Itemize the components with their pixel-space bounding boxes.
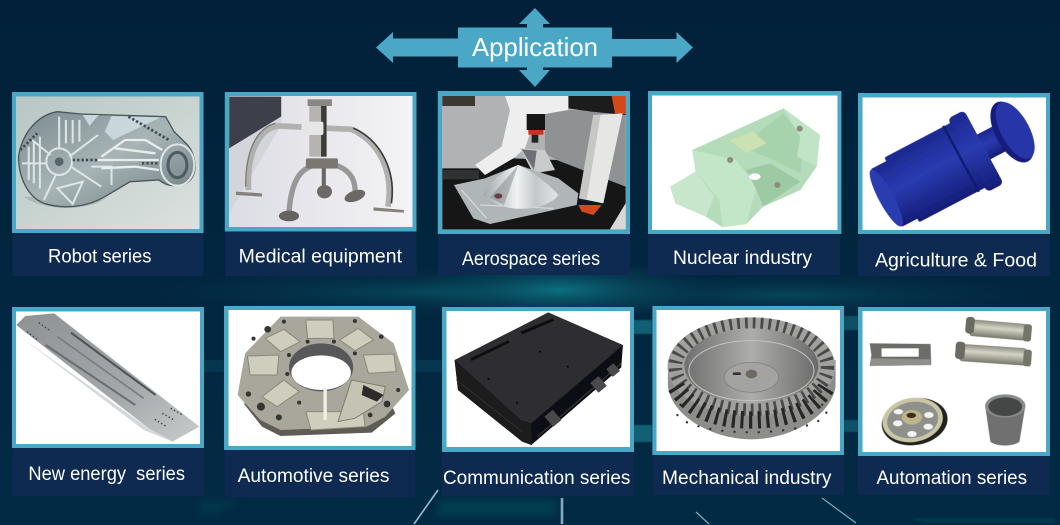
caption band	[12, 448, 204, 496]
panel: new energy series	[12, 307, 204, 496]
octagonal mould plate	[238, 317, 409, 436]
image frame	[438, 91, 630, 234]
caption: Agriculture & Food	[875, 251, 1037, 272]
blue anodized pin	[860, 87, 1048, 238]
photo background	[16, 312, 200, 444]
caption band	[225, 232, 416, 276]
inspection machine with dome part	[442, 96, 626, 229]
image frame	[648, 91, 841, 234]
photo background	[446, 311, 630, 447]
photo background	[656, 310, 840, 451]
caption: Automation series	[876, 468, 1027, 489]
title box	[458, 28, 612, 68]
four small machined parts	[870, 317, 1032, 450]
caption: Mechanical industry	[662, 468, 832, 489]
caption band	[225, 450, 415, 497]
panel: automation series	[858, 307, 1050, 495]
title text: Application	[472, 32, 598, 62]
image frame	[652, 306, 844, 455]
arrow: right	[610, 32, 693, 63]
arrow: down	[519, 65, 550, 87]
photo background	[16, 96, 200, 229]
caption: Communication series	[443, 468, 630, 489]
green insulating block	[670, 108, 820, 227]
panel: nuclear industry	[648, 91, 841, 275]
panel: automotive series	[224, 306, 416, 497]
caption band	[858, 456, 1050, 495]
photo background	[652, 96, 838, 230]
arrow: up	[519, 8, 550, 30]
photo background	[228, 310, 412, 446]
photo background	[229, 96, 412, 227]
caption: Aerospace series	[462, 249, 600, 270]
photo background	[862, 311, 1046, 452]
panel: agriculture and food	[858, 87, 1050, 276]
panel: mechanical industry	[652, 306, 844, 495]
caption band	[438, 234, 630, 275]
machined robot plate	[19, 112, 195, 208]
image frame	[858, 307, 1050, 456]
image frame	[12, 92, 204, 233]
caption band	[12, 233, 204, 276]
image frame	[858, 93, 1050, 234]
photo background	[862, 98, 1046, 230]
arrow: left	[376, 32, 460, 63]
slotted stator ring	[668, 317, 836, 439]
panel: medical equipment	[225, 92, 416, 276]
long tapered blade	[16, 313, 199, 442]
photo background	[442, 96, 626, 230]
image frame	[442, 307, 634, 452]
caption: Nuclear industry	[673, 248, 813, 269]
panel: robot series	[12, 92, 204, 276]
caption: New energy series	[28, 464, 185, 485]
stainless tripod fixture	[229, 97, 404, 221]
caption band	[653, 455, 844, 495]
title arrow badge: Application	[376, 8, 693, 87]
caption: Robot series	[48, 247, 152, 268]
panel: aerospace series	[438, 91, 630, 275]
caption band	[442, 452, 634, 496]
caption: Automotive series	[238, 466, 390, 487]
image frame	[12, 307, 204, 448]
caption: Medical equipment	[239, 247, 403, 268]
image frame	[224, 306, 416, 450]
caption band	[648, 235, 840, 275]
panel: communication series	[442, 307, 634, 496]
image frame	[225, 92, 416, 232]
caption band	[858, 235, 1050, 276]
black aluminium enclosure	[455, 312, 623, 445]
